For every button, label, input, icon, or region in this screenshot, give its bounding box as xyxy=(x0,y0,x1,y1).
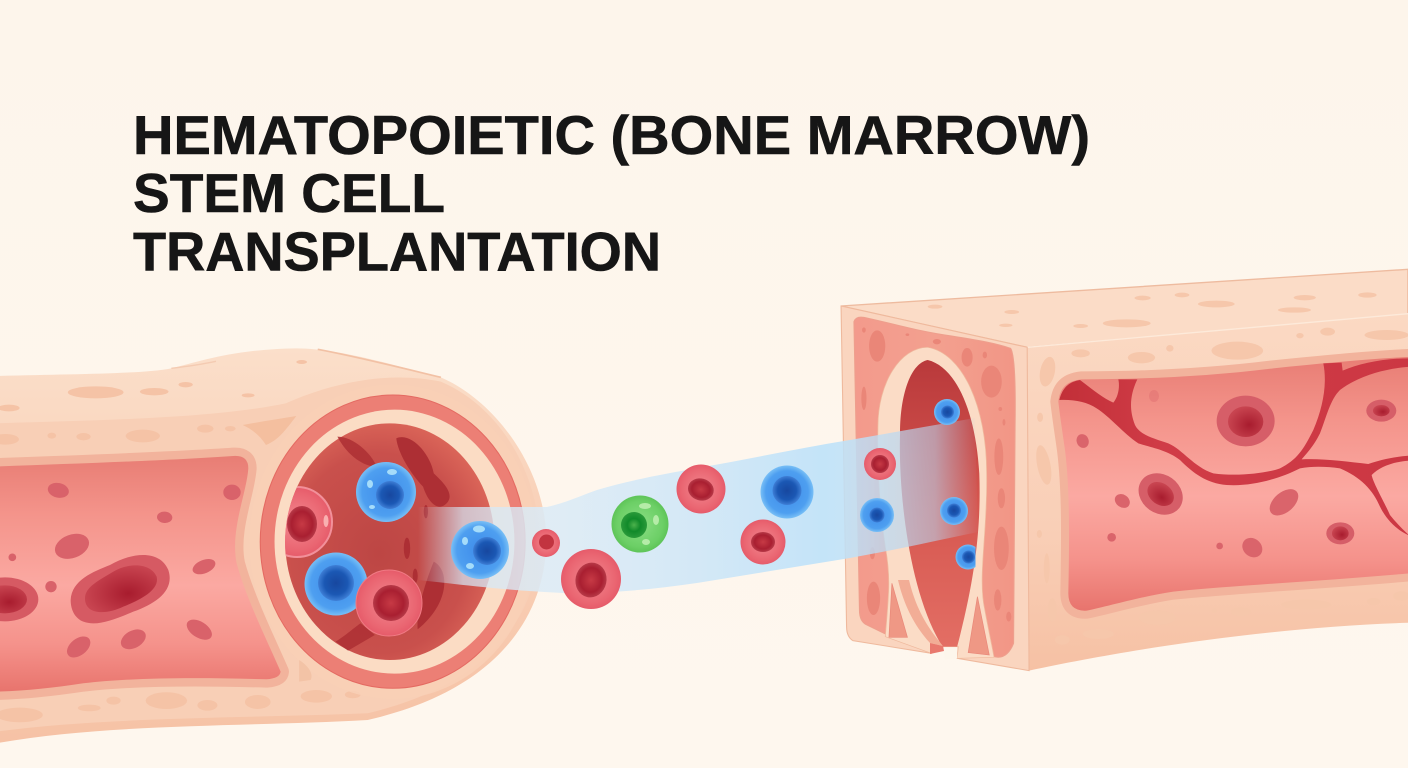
green stem cell xyxy=(612,496,668,552)
end face xyxy=(841,306,1029,671)
top surface xyxy=(841,269,1408,347)
stream cells xyxy=(451,399,980,609)
tissue spots xyxy=(928,292,1408,645)
red cell at wall xyxy=(864,448,896,480)
blue cell upper xyxy=(356,462,416,522)
blue cell at wall xyxy=(860,498,894,532)
right bone block xyxy=(841,269,1408,671)
lumen strands xyxy=(336,437,450,651)
transplant cell stream xyxy=(418,418,978,593)
marrow cavity xyxy=(0,456,281,692)
title: STEM CELL xyxy=(133,162,445,224)
blue cell mid lumen xyxy=(940,497,968,525)
arch lumen xyxy=(900,360,980,647)
red cell lower xyxy=(356,570,422,636)
inner ring xyxy=(275,410,514,674)
blue cell entering xyxy=(451,521,509,579)
left bone cross-section xyxy=(0,348,546,743)
tissue halo xyxy=(249,384,536,699)
ring wall xyxy=(260,395,525,688)
blue cell bottom lumen xyxy=(956,544,976,570)
arch foot xyxy=(930,643,944,654)
osteocyte cells xyxy=(1130,396,1396,544)
arch inner wall shading xyxy=(898,580,943,646)
title: TRANSPLANTATION xyxy=(133,220,661,282)
left lacuna xyxy=(0,577,38,621)
large lacuna xyxy=(71,555,170,623)
marrow spots right xyxy=(1075,390,1303,561)
red cell clipped by lumen xyxy=(285,486,333,558)
red cell upper xyxy=(676,464,726,514)
title xyxy=(133,104,1090,282)
end face spots xyxy=(861,327,1011,622)
base wedges xyxy=(889,583,907,637)
large red cell xyxy=(561,549,621,609)
blood vessels xyxy=(1059,358,1408,536)
end face pink tissue xyxy=(854,317,1015,657)
right marrow cavity xyxy=(1058,357,1408,611)
blue cell middle xyxy=(760,466,814,518)
lumen xyxy=(285,423,494,660)
bone tissue xyxy=(0,348,546,743)
small red cell xyxy=(532,529,560,557)
red cell lower middle xyxy=(740,520,786,564)
lumen cells xyxy=(285,462,422,636)
blue cell lower xyxy=(304,552,368,616)
side surface xyxy=(1027,313,1408,671)
blue cell top of lumen xyxy=(934,399,960,425)
marrow spots xyxy=(8,481,241,662)
notch xyxy=(944,647,957,659)
title: HEMATOPOIETIC (BONE MARROW) xyxy=(133,104,1090,166)
arch wall xyxy=(878,347,994,658)
